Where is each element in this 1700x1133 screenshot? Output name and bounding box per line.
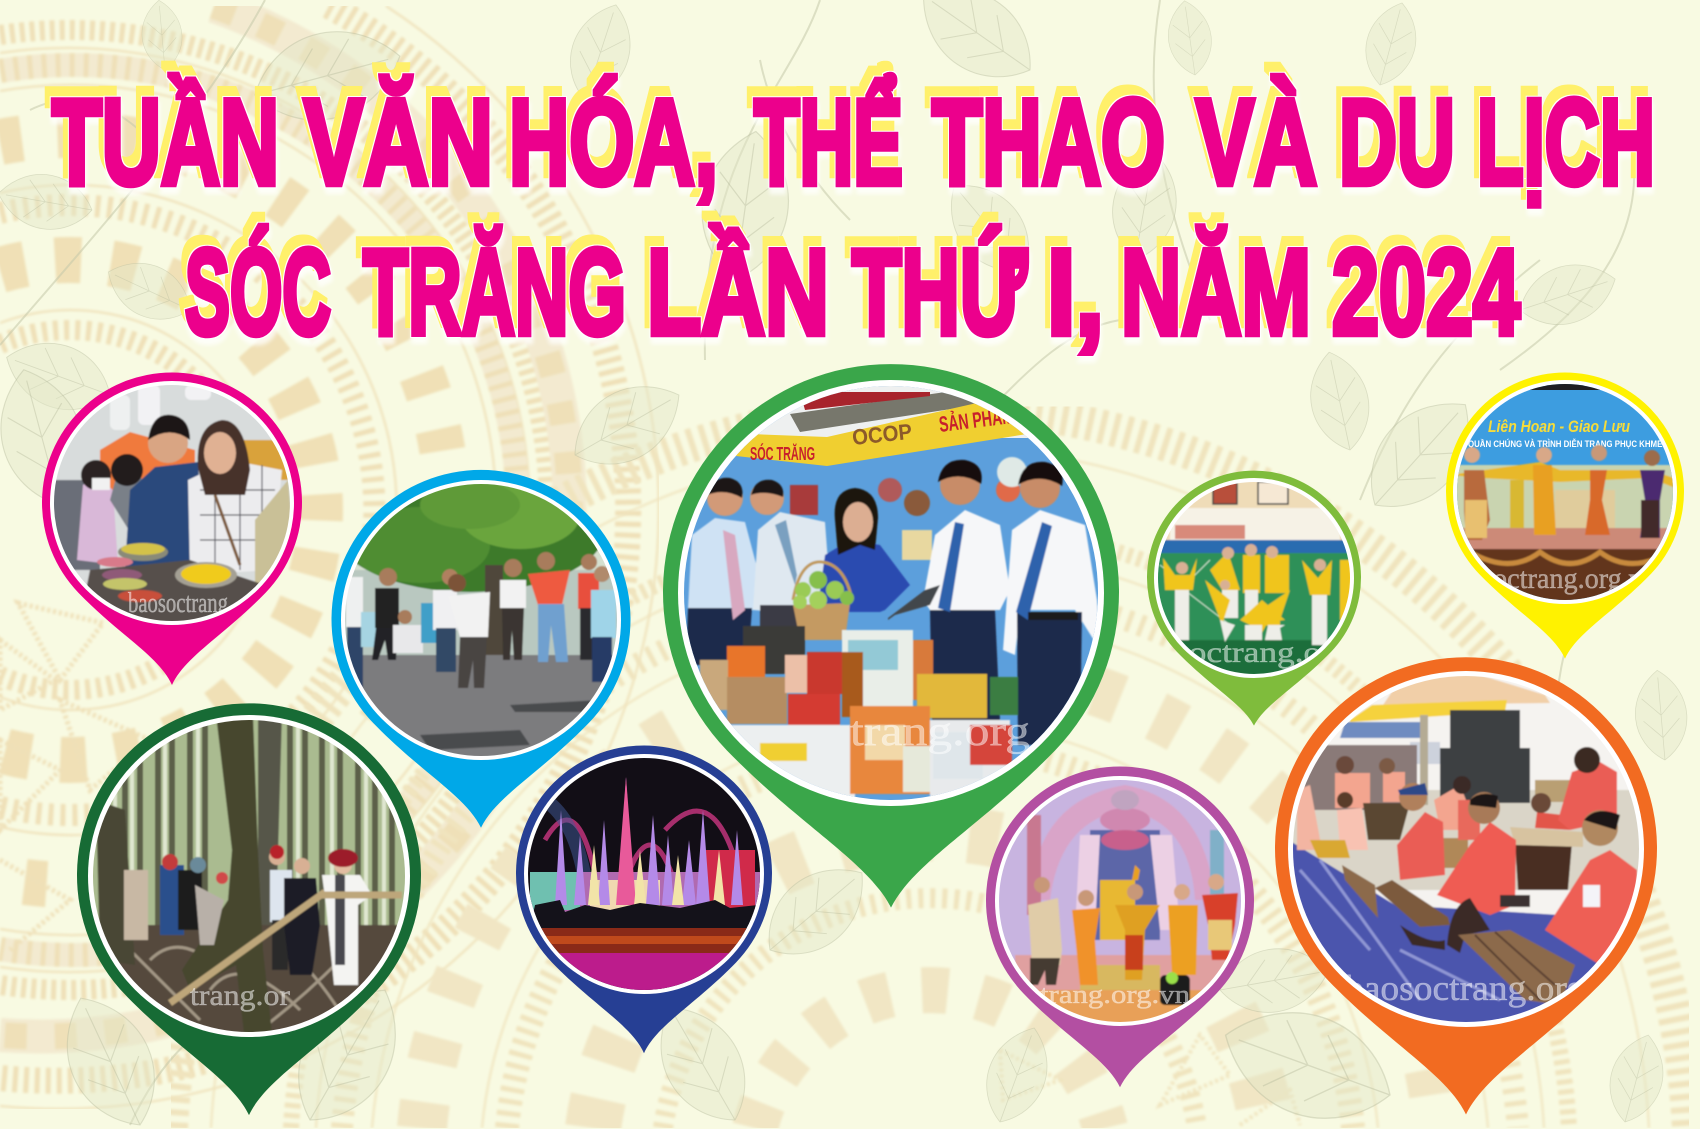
pin shape: [332, 470, 630, 828]
photo: dance stage: [995, 775, 1245, 1030]
title line 2: THỨ: [852, 224, 1028, 360]
title line 1: VÀ: [1196, 74, 1317, 210]
pin: Khmer orchestra (orange): [1275, 657, 1657, 1114]
title line 1: THAO: [932, 74, 1165, 210]
title: [52, 74, 1655, 360]
white ring: [1154, 478, 1354, 678]
white ring: [524, 754, 764, 994]
title line 2: LẦN: [647, 224, 829, 360]
photo: stage performance: [1457, 384, 1673, 600]
title line 1: DU: [1339, 74, 1455, 210]
drum rays: [0, 603, 150, 950]
pin shape: [1446, 373, 1684, 659]
watermark: soctrang.org.vn: [1482, 562, 1657, 595]
pin: mangrove forest (dark green): [77, 703, 421, 1115]
watermark: trang.org: [850, 709, 1030, 755]
watermark: trang.or: [190, 979, 290, 1012]
people: [688, 518, 763, 610]
pin: night fountain (navy): [516, 745, 772, 1053]
photo: petanque: [345, 484, 617, 756]
pin shape: [77, 703, 421, 1115]
pin shape: [1275, 657, 1657, 1114]
title line 2: 2024: [1332, 224, 1520, 360]
white ring: [1288, 671, 1644, 1027]
pin shape: [42, 372, 302, 685]
pin: folk performance (yellow): [1446, 373, 1684, 659]
bronze drum pattern: left: [0, 6, 659, 1109]
title line 2: I,: [1047, 224, 1104, 360]
photo: gymnastics: [1158, 482, 1350, 674]
white ring: [995, 776, 1245, 1026]
title line 1: HÓA,: [509, 74, 718, 210]
pin: Khmer dance (purple): [986, 766, 1254, 1087]
booth signs: SÓC TRĂNG: [750, 443, 815, 464]
watermark: baosoctrang: [128, 588, 228, 619]
photo: food stall: [54, 385, 290, 621]
pin shape: [663, 364, 1119, 908]
pin: OCOP trade fair (large green): [663, 364, 1119, 908]
photo: fountain: [525, 755, 765, 1003]
pin shape: [986, 766, 1254, 1087]
title line 1: VĂN: [304, 74, 493, 210]
photo: OCOP booth: SẢN PHẨM: [938, 403, 1015, 437]
photo: mangrove forest: [90, 715, 410, 1040]
pin shape: [516, 745, 772, 1053]
title line 1: TUẦN: [52, 74, 279, 210]
basket of fruit: [793, 562, 852, 600]
white ring: [341, 480, 621, 760]
photo: stage performance: QUẦN CHÚNG VÀ TRÌNH DIỄN TRANG PHỤC KHMER: [1468, 438, 1668, 449]
photo: orchestra: [1293, 676, 1639, 1022]
watermark: trang.org.vn: [1040, 980, 1190, 1009]
title line 1: THỂ: [754, 74, 903, 210]
pin: petanque players (blue): [332, 468, 630, 828]
pin: food stall (magenta): [42, 372, 302, 685]
bottom white edge: [0, 1129, 1700, 1133]
photo: OCOP booth: OCOP: [851, 419, 913, 450]
banner text: Liên Hoan - Giao Lưu: [1488, 417, 1630, 436]
pin: mass gymnastics (lime): [1147, 471, 1361, 726]
white ring: [1453, 380, 1677, 604]
title line 1: [52, 74, 1655, 210]
white ring: [50, 381, 294, 625]
pin shape: [1147, 471, 1361, 726]
bronze drum pattern: lower right: [171, 407, 1689, 1128]
white ring: [678, 380, 1104, 806]
white ring: [88, 715, 410, 1037]
title line 2: [185, 224, 1520, 360]
watermark: soctrang.org: [1175, 636, 1350, 669]
watermark: baosoctrang.org: [1345, 968, 1585, 1008]
title line 2: SÓC: [185, 224, 331, 360]
photo: OCOP booth: [680, 380, 1105, 805]
title line 2: NĂM: [1121, 224, 1311, 360]
product boxes: [743, 626, 805, 674]
title line 2: TRĂNG: [363, 224, 626, 360]
